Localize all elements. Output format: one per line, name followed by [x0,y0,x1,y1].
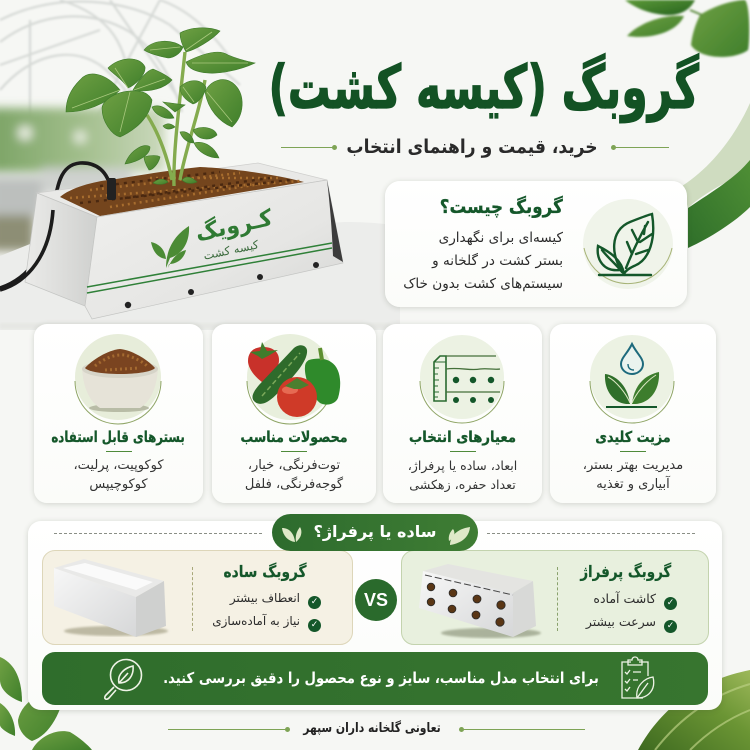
list: advantages: ✓ [667,598,674,608]
text: definition: کیسه‌ای برای نگهداری [439,230,563,246]
bottom left leaves [0,657,92,750]
text: توت‌فرنگی، خیار، [248,458,340,473]
heading: گروبگ ساده [224,562,307,581]
heading pill: plain or perforated [272,514,478,551]
subtitle [281,136,669,158]
text: definition: سیستم‌های کشت بدون خاک [403,276,563,292]
heading: مزیت کلیدی [595,428,671,446]
heading pill: plain or perforated: ساده یا پرفراژ؟ [314,522,436,541]
text: آبیاری و تغذیه [596,477,670,492]
panel: comparison [28,521,722,710]
text: definition: بستر کشت در گلخانه و [432,253,563,269]
heading: what is growbag: گروبگ چیست؟ [440,196,563,218]
list: properties [212,591,321,632]
text: تعداد حفره، زهکشی [409,477,516,492]
greenhouse background [0,0,400,330]
subtitle: خرید، قیمت و راهنمای انتخاب [346,136,598,158]
title: گروبگ (کیسه کشت) [268,53,699,123]
panel: suitable crops [212,324,376,503]
banner: call to action [42,652,708,705]
list: advantages: سرعت بیشتر [586,614,656,629]
plant [66,28,255,186]
list: advantages: ✓ [667,621,674,631]
text [583,458,683,492]
icon: magnifier with leaf [104,658,142,700]
grow bag with soil, hose and print [0,163,343,319]
panel: key benefit [550,324,716,503]
text: مدیریت بهتر بستر، [583,458,683,473]
icon: bowl of substrate [74,334,162,424]
list: advantages: کاشت آماده [593,591,656,606]
heading: محصولات مناسب [240,428,348,446]
badge: VS: VS [364,590,388,610]
bag label: subtitle: کیسه کشت [202,237,260,263]
heading: معیارهای انتخاب [409,428,516,446]
text: کوکوپیت، پرلیت، [73,458,164,473]
text: کوکوچیپس [89,477,148,492]
banner text: برای انتخاب مدل مناسب، سایز و نوع محصول را دقیق بررسی کنید. [163,669,599,687]
bottom right leaf [638,670,750,750]
list: properties: نیاز به آماده‌سازی [212,614,300,628]
icon: clipboard [621,656,654,699]
icon: water drop and sprout [590,335,674,424]
list: advantages [585,591,677,633]
icon: vegetables [246,334,340,424]
panel: usable substrates [34,324,203,503]
icon: pill leaves [282,527,470,545]
heading: بسترهای قابل استفاده [51,428,185,446]
list: properties: انعطاف بیشتر [230,591,300,605]
text: ابعاد، ساده یا پرفراژ، [408,458,517,473]
badge: VS [355,579,397,621]
text: definition [403,230,563,292]
footer [168,720,585,736]
top right leaves [625,0,749,57]
text [245,457,344,492]
panel: what is growbag [385,181,687,307]
footer: تعاونی گلخانه داران سپهر [303,721,441,736]
text [73,458,164,492]
icon: measurement [420,335,504,424]
panel: plain growbag [42,550,353,645]
right swoosh [682,103,750,248]
text [408,458,517,492]
list: properties: ✓ [311,620,318,630]
list: properties: ✓ [311,597,318,607]
icon: leaf in circle [583,199,673,289]
illustration: perforated bag [419,564,542,639]
panel: selection criteria [383,324,542,503]
text: گوجه‌فرنگی، فلفل [245,477,343,492]
illustration: plain bag [54,559,168,637]
heading: گروبگ پرفراژ [580,562,671,581]
bag label: brand: کـرویگ [193,205,275,247]
panel: perforated growbag [401,550,709,645]
